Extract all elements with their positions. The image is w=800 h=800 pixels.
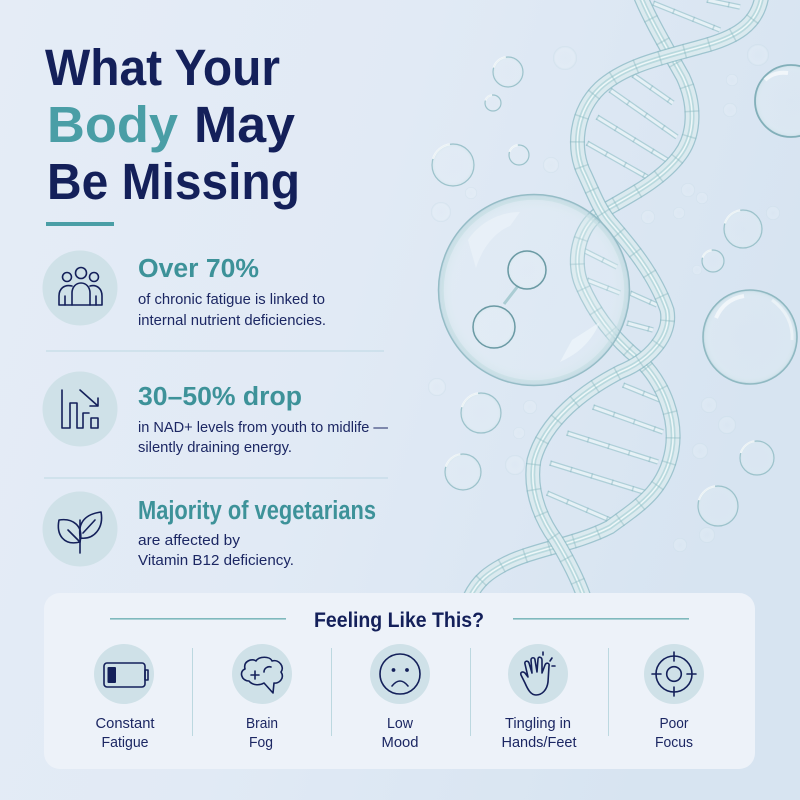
symptom: poor focus: Focus <box>655 735 693 751</box>
text: 30-50% drop: 30–50% drop <box>138 383 302 411</box>
large bubble with molecule <box>438 194 630 386</box>
stat: 30-50% drop <box>42 372 388 456</box>
symptom: brain fog: Fog <box>249 735 273 751</box>
symptom: low mood: Mood <box>382 735 418 751</box>
text: over 70%: Over 70% <box>138 255 259 283</box>
text: 30-50% drop: silently draining energy. <box>138 440 292 456</box>
symptom: poor focus <box>644 644 704 751</box>
title: May <box>194 96 296 153</box>
stat: majority of vegetarians <box>42 492 376 569</box>
symptom: brain fog: Brain <box>246 716 278 732</box>
symptom: tingling hands and feet <box>502 644 576 751</box>
symptom: constant fatigue: Constant <box>96 716 154 732</box>
DNA strand front <box>533 0 762 597</box>
text: 30-50% drop <box>138 383 388 456</box>
text: over 70% <box>138 255 326 329</box>
text: over 70%: of chronic fatigue is linked to <box>138 292 325 308</box>
text: majority of vegetarians: Majority of vegetarians <box>138 497 376 525</box>
title <box>45 39 300 210</box>
DNA strand back <box>470 0 692 597</box>
title underline <box>46 222 114 226</box>
clear bubbles <box>432 57 800 526</box>
title: Be Missing <box>47 153 300 210</box>
title: Body <box>47 96 179 153</box>
symptom: low mood: Low <box>387 716 414 732</box>
text: majority of vegetarians: Vitamin B12 deficiency. <box>138 553 294 569</box>
panel heading: Feeling Like This? <box>314 609 484 632</box>
icon: people <box>42 250 118 326</box>
text: over 70%: internal nutrient deficiencies. <box>138 313 326 329</box>
faint background bubbles <box>428 44 780 552</box>
symptom: low mood <box>370 644 430 751</box>
text: majority of vegetarians: are affected by <box>138 533 241 549</box>
DNA rungs <box>547 0 740 520</box>
symptom: constant fatigue: Fatigue <box>102 735 148 751</box>
symptom: brain fog <box>232 644 292 751</box>
stat: over 70% <box>42 250 326 329</box>
text: 30-50% drop: in NAD+ levels from youth to midlife — <box>138 420 388 436</box>
icon: declining chart <box>42 372 118 446</box>
illustration: glass DNA helix and bubbles <box>428 0 800 597</box>
title: What Your <box>45 39 280 96</box>
symptom: tingling hands and feet: Hands/Feet <box>502 735 576 751</box>
symptom: poor focus: Poor <box>660 716 689 732</box>
symptom: constant fatigue <box>94 644 154 751</box>
text: majority of vegetarians <box>138 497 376 569</box>
symptom: tingling hands and feet: Tingling in <box>505 716 571 732</box>
panel: feeling like this <box>44 593 755 769</box>
icon: leaf sprout <box>42 492 118 566</box>
